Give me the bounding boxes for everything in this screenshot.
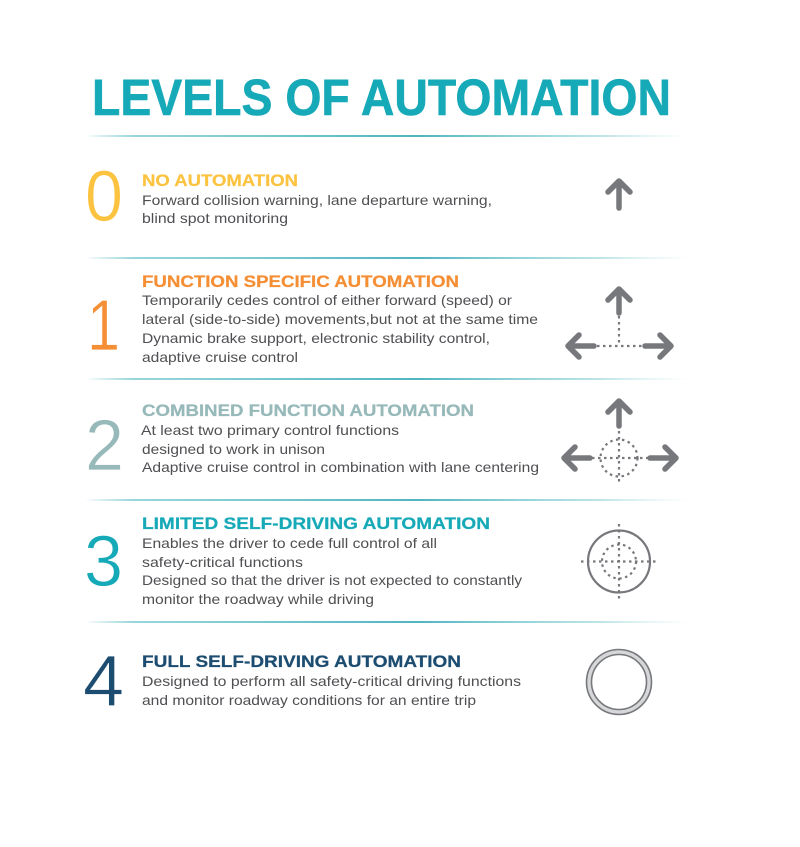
heading: combined function automation: COMBINED FUNCTION AUTOMATION <box>142 401 474 420</box>
number 2: 2 <box>85 406 124 486</box>
description: level 0 <box>142 192 492 226</box>
icon: three arrows with dotted cross <box>568 289 671 357</box>
icon: circle with dotted crosshair <box>581 524 658 600</box>
description: level 1: Temporarily cedes control of either forward (speed) or <box>142 292 512 308</box>
title: LEVELS OF AUTOMATION <box>92 69 671 126</box>
description: level 1 <box>142 292 538 365</box>
description: level 1: lateral (side-to-side) movements,but not at the same time <box>142 311 538 327</box>
heading: full self-driving automation: FULL SELF-DRIVING AUTOMATION <box>142 652 461 671</box>
icon: double ring <box>586 650 652 714</box>
icon: arrows with dotted circle <box>564 401 676 484</box>
description: level 4: and monitor roadway conditions for an entire trip <box>142 692 476 708</box>
number 4: 4 <box>83 642 124 722</box>
description: level 3: safety-critical functions <box>142 554 303 570</box>
description: level 0: blind spot monitoring <box>142 210 288 226</box>
description: level 2: designed to work in unison <box>142 441 325 457</box>
description: level 1: adaptive cruise control <box>142 349 298 365</box>
number 1: 1 <box>87 286 120 366</box>
number 3: 3 <box>84 522 123 602</box>
heading: no automation: NO AUTOMATION <box>142 171 298 190</box>
description: level 2: At least two primary control functions <box>141 422 399 438</box>
description: level 2 <box>141 422 539 475</box>
panel: level 2 <box>85 401 676 486</box>
heading: function specific automation: FUNCTION SPECIFIC AUTOMATION <box>142 272 459 291</box>
panel: level 4 <box>83 642 652 722</box>
panel: level 3 <box>84 514 658 607</box>
description: level 4 <box>142 673 521 708</box>
panel: level 0 <box>85 157 630 237</box>
description: level 3: Enables the driver to cede full control of all <box>142 535 437 551</box>
description: level 0: Forward collision warning, lane departure warning, <box>142 192 492 208</box>
description: level 4: Designed to perform all safety-critical driving functions <box>142 673 521 689</box>
description: level 1: Dynamic brake support, electronic stability control, <box>142 330 490 346</box>
number 0: 0 <box>85 157 123 237</box>
description: level 3: Designed so that the driver is not expected to constantly <box>142 572 522 588</box>
description: level 2: Adaptive cruise control in combination with lane centering <box>142 459 539 475</box>
description: level 3 <box>142 535 522 607</box>
panel: level 1 <box>87 272 671 366</box>
heading: limited self-driving automation: LIMITED SELF-DRIVING AUTOMATION <box>142 514 490 533</box>
description: level 3: monitor the roadway while driving <box>142 591 374 607</box>
icon: up arrow <box>608 181 630 208</box>
